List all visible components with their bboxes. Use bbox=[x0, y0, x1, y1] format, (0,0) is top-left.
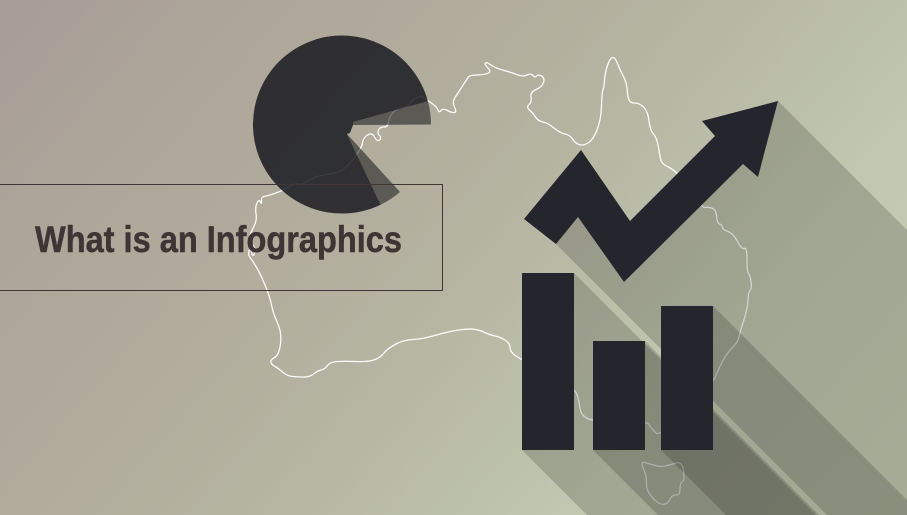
bar 3 bbox=[661, 306, 713, 450]
arrow shadow bbox=[556, 101, 907, 515]
mainland outline bbox=[249, 57, 751, 434]
bar 3 shadow bbox=[661, 306, 907, 515]
bar 1 shadow bbox=[522, 273, 816, 515]
Tasmania outline bbox=[642, 462, 684, 504]
long shadows bbox=[522, 101, 907, 515]
pie lower light sector bbox=[347, 134, 400, 205]
map of Australia outline bbox=[249, 57, 751, 504]
pie upper light sector bbox=[353, 101, 431, 125]
pie main sector bbox=[253, 36, 428, 214]
icon: rising arrow bbox=[524, 101, 778, 282]
title box bbox=[0, 184, 442, 290]
bar 2 bbox=[593, 341, 645, 450]
bar chart icon bbox=[522, 273, 713, 450]
title: What is an Infographics bbox=[35, 219, 402, 260]
bar 2 shadow bbox=[593, 341, 819, 515]
bar 1 bbox=[522, 273, 574, 450]
pie chart bbox=[253, 36, 431, 214]
